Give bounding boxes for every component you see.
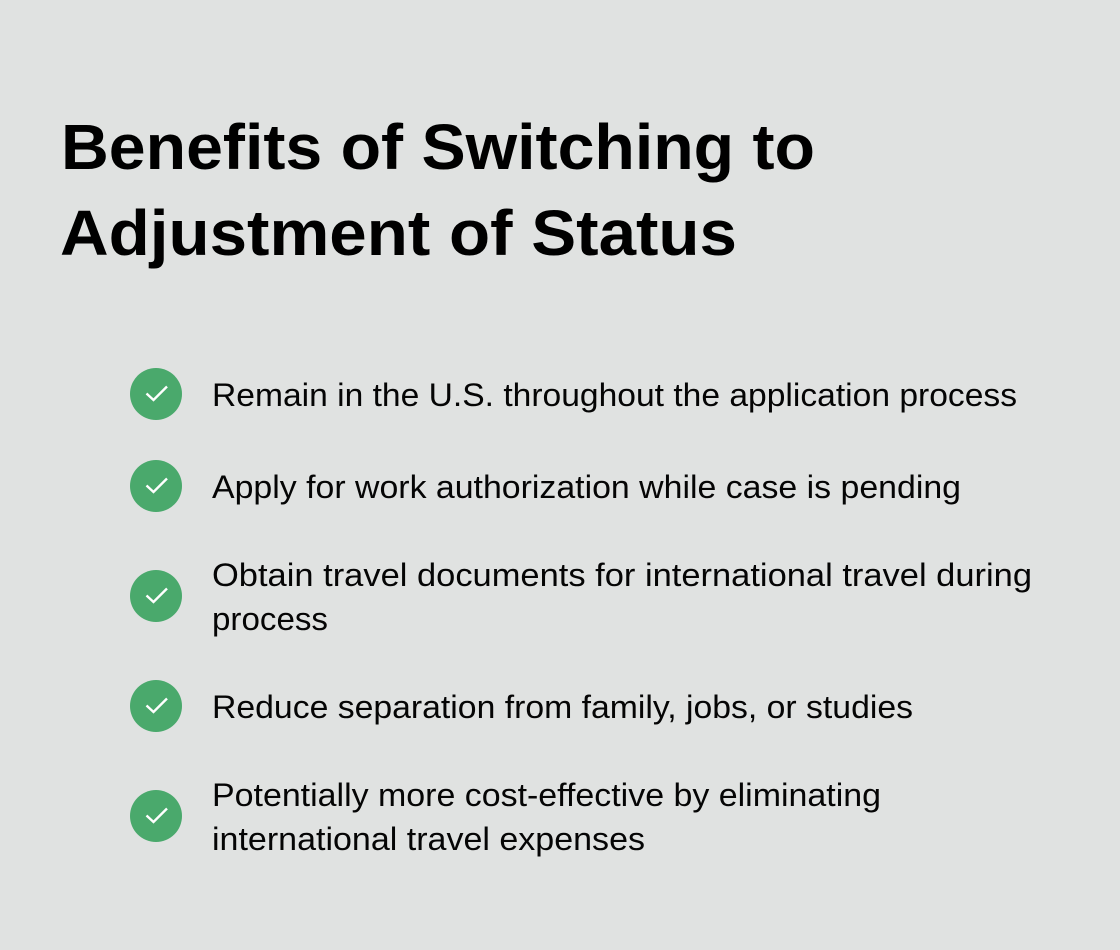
title [60, 111, 815, 269]
benefit item: travel documents: process [212, 601, 328, 637]
benefit item: work authorization [130, 460, 961, 512]
title: Adjustment of Status [60, 197, 737, 269]
benefit item: work authorization: Apply for work authorization while case is pending [212, 469, 961, 505]
benefit item: cost-effective [130, 777, 881, 857]
benefit item: cost-effective: international travel expenses [212, 821, 645, 857]
benefit item: remain in the U.S.: Remain in the U.S. throughout the application process [212, 377, 1017, 413]
title: Benefits of Switching to [61, 111, 815, 183]
benefit item: cost-effective: Potentially more cost-effective by eliminating [212, 777, 881, 813]
benefit item: remain in the U.S. [130, 368, 1017, 420]
benefit item: reduce separation: Reduce separation from family, jobs, or studies [212, 689, 913, 725]
benefit item: travel documents [130, 557, 1032, 637]
benefit item: reduce separation [130, 680, 913, 732]
benefit item: travel documents: Obtain travel documents for international travel during [212, 557, 1032, 593]
